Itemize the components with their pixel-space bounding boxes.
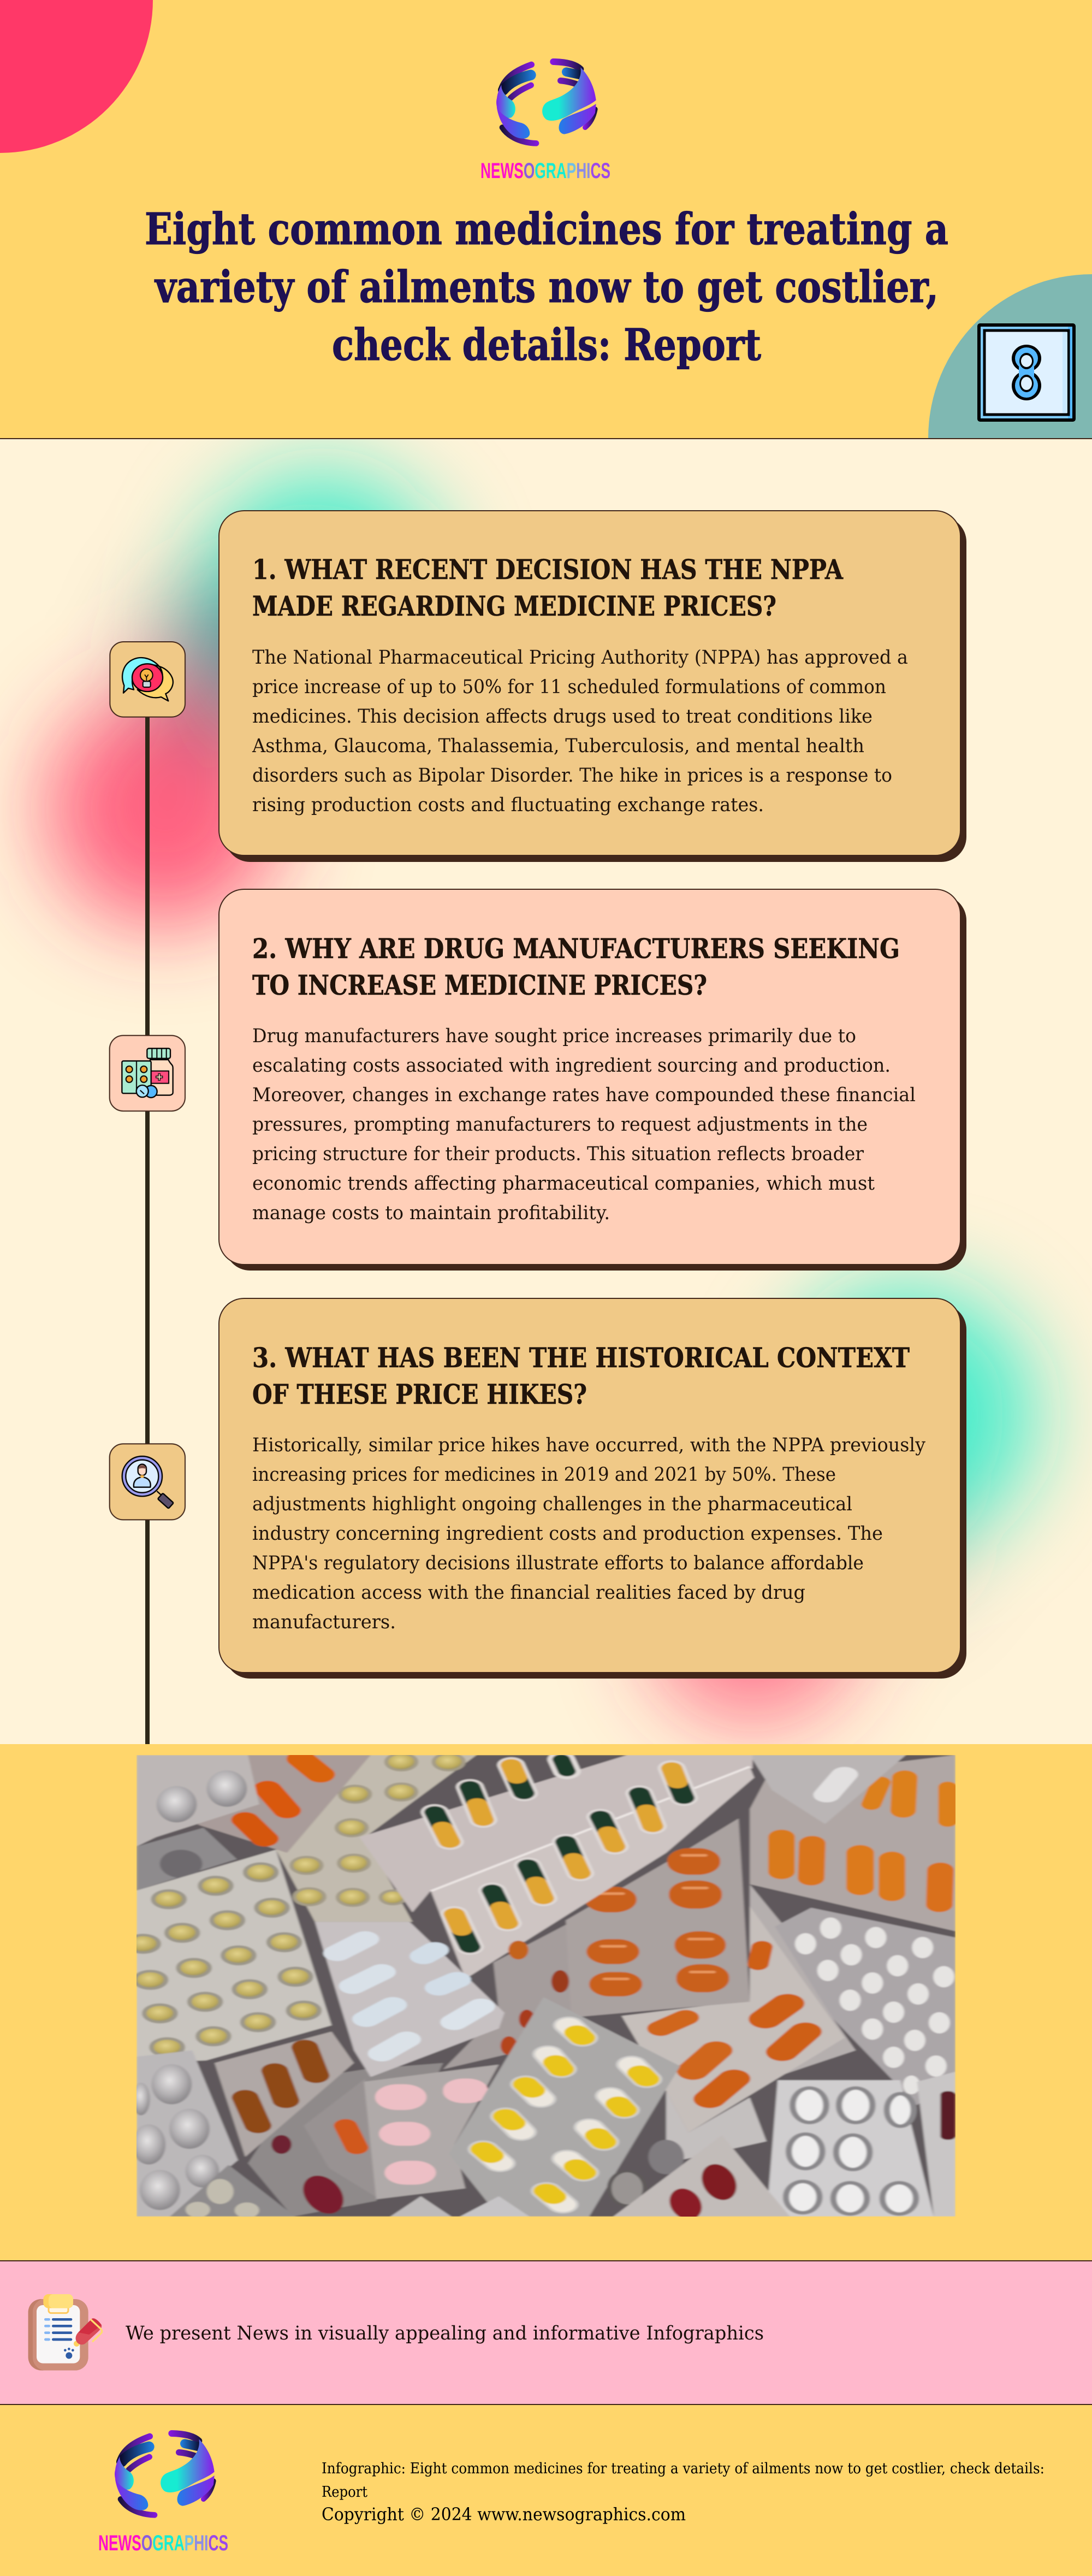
heading: question 2: 2. WHY ARE DRUG MANUFACTURERS SEEKING [252,932,900,965]
orange oblong tablets pack [566,1818,750,2017]
grey top-left pack [136,1755,259,1847]
cream content panel [0,439,1092,1744]
white tablets pack [775,1908,956,2105]
tagline text: We present News in visually appealing and informative Infographics [126,2323,764,2344]
heading: question 2: TO INCREASE MEDICINE PRICES? [252,969,707,1001]
heading: question 1: MADE REGARDING MEDICINE PRICES? [252,590,776,622]
heading: question 3: 3. WHAT HAS BEEN THE HISTORICAL CONTEXT [252,1342,910,1374]
yellow photo band [0,1744,1092,2261]
footer credits: Report [322,2484,367,2501]
footer credits: Copyright © 2024 www.newsographics.com [322,2504,686,2525]
blurred colour blobs [46,472,1035,1723]
icon: speech bubbles with light bulb [110,642,185,717]
panel: question 3 [219,1298,966,1679]
text: answer 1: price increase of up to 50% for 11 scheduled formulations of common [252,676,886,698]
dark red capsule [296,2173,350,2216]
logo wordmark: NEWSOGRAPHICS [480,159,610,183]
timeline line [145,717,150,1744]
icon: number eight tile [979,325,1074,420]
heading: question 1: 1. WHAT RECENT DECISION HAS THE NPPA [252,553,844,586]
heading: question 3 [252,1342,910,1410]
text: answer 3: Historically, similar price hikes have occurred, with the NPPA previously [252,1434,925,1456]
small bottom-left pack [170,2165,295,2217]
text: answer 3: manufacturers. [252,1611,396,1633]
orange capsule pack [304,2078,377,2198]
footer credits [322,2460,1044,2525]
bottom dark blisters [609,2171,645,2206]
red fragments behind [501,2036,517,2055]
panel: question 1 [219,511,966,862]
backing gold pack [276,1755,477,1922]
text: answer 2 [252,1025,916,1224]
title: Eight common medicines for treating a [145,203,948,255]
footer wordmark: NEWSOGRAPHICS [98,2531,228,2555]
header band [0,0,1092,439]
text: answer 3: medication access with the financial realities faced by drug [252,1582,805,1604]
pale blue tablets pack [315,1922,505,2077]
decorative teal quarter circle [928,274,1092,438]
text: answer 1: Asthma, Glaucoma, Thalassemia, Tuberculosis, and mental health [252,735,864,757]
icon: clipboard and pen [28,2294,102,2371]
decorative pink quarter circle [0,0,153,153]
text: answer 1: disorders such as Bipolar Disorder. The hike in prices is a response to [252,765,892,787]
text: answer 2: Drug manufacturers have sought price increases primarily due to [252,1025,856,1047]
capsule halos [435,1759,684,1947]
bottom red pill pack [613,2135,790,2217]
yellow and green capsules [435,1759,684,1947]
text: answer 2: escalating costs associated with ingredient sourcing and production. [252,1055,891,1077]
heading: question 2 [252,932,900,1001]
text: answer 2: pressures, prompting manufacturers to request adjustments in the [252,1114,868,1136]
icon: magnifying glass over person [110,1444,185,1520]
footer logo [115,2433,215,2515]
title: variety of ailments now to get costlier, [154,261,939,312]
text: answer 2: economic trends affecting pharmaceutical companies, which must [252,1173,875,1195]
text: answer 2: manage costs to maintain profitability. [252,1202,610,1224]
text: answer 3: NPPA's regulatory decisions illustrate efforts to balance affordable [252,1552,864,1574]
orange lower-right pack [621,1906,845,2132]
bottom light packs [390,2196,452,2217]
text: answer 3: industry concerning ingredient costs and production expenses. The [252,1523,883,1545]
title: check details: Report [332,319,761,370]
gold tablets pack [136,1850,331,2063]
yellow and white capsule pack [449,1997,680,2217]
text: answer 1: medicines. This decision affects drugs used to treat conditions like [252,706,873,728]
header bottom rule [0,438,1092,439]
text: answer 2: Moreover, changes in exchange rates have compounded these financial [252,1084,916,1106]
orange top pack [198,1755,371,1853]
text: answer 3 [252,1434,925,1633]
footer credits: Infographic: Eight common medicines for treating a variety of ailments now to get costlier, check details: [322,2460,1044,2477]
capsule strip one [359,1755,752,1912]
silver six blister pack [767,2080,934,2217]
grey top-right pack [750,1755,906,1824]
logo: Newsographics globe [496,62,596,143]
heading: question 3: OF THESE PRICE HIKES? [252,1378,587,1410]
capsule strip two [431,1766,754,1979]
text: answer 1: The National Pharmaceutical Pricing Authority (NPPA) has approved a [252,647,908,669]
brown capsule pack [215,2031,354,2157]
orange right pack [750,1755,956,1931]
icon: medicine bottle and blister pack [110,1036,185,1111]
title [145,203,948,370]
text: answer 2: pricing structure for their products. This situation reflects broader [252,1143,864,1165]
far-right pack [917,2072,956,2217]
silver lower-left pack [136,2051,238,2217]
photo: blister packs of pills [136,1755,956,2217]
text: answer 3: adjustments highlight ongoing challenges in the pharmaceutical [252,1493,852,1515]
panel: tagline band [0,2260,1092,2405]
pink tablets pack [364,2065,499,2199]
backing grey packs [443,1922,574,2069]
heading: question 1 [252,553,844,622]
text: answer 1 [252,647,908,816]
text: answer 1: rising production costs and fluctuating exchange rates. [252,794,764,816]
panel: question 2 [219,889,966,1271]
text: answer 3: increasing prices for medicines in 2019 and 2021 by 50%. These [252,1464,836,1486]
